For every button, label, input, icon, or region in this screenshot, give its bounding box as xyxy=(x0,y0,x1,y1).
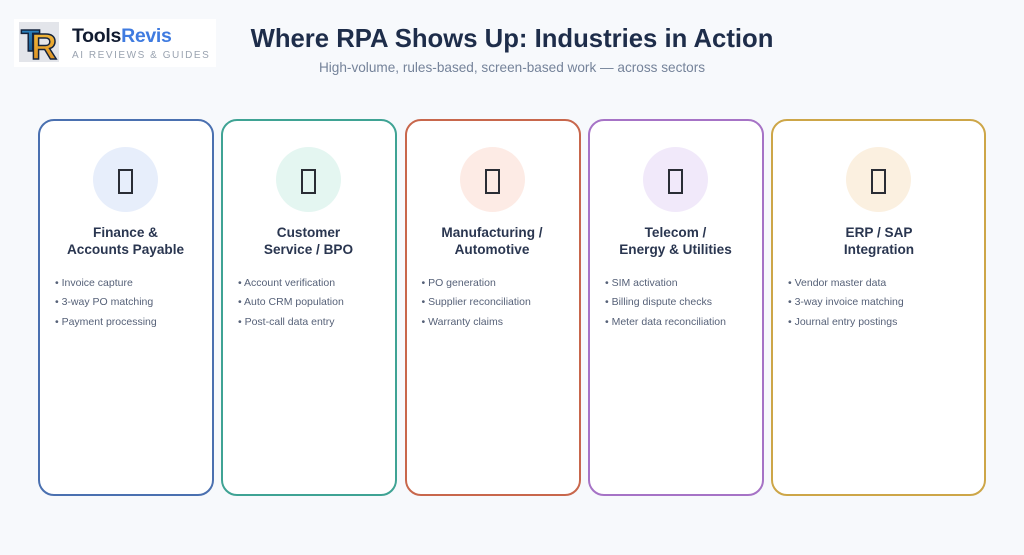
heading: customer service xyxy=(264,225,353,257)
list: erp: • Journal entry postings xyxy=(788,316,897,328)
icon: telecom xyxy=(643,147,708,212)
heading: manufacturing: Automotive xyxy=(455,242,529,257)
title: Where RPA Shows Up: Industries in Action xyxy=(251,24,773,52)
panel: telecom xyxy=(588,119,764,496)
list: erp: • 3-way invoice matching xyxy=(788,296,904,308)
heading: telecom: Telecom / xyxy=(645,225,706,240)
icon: finance xyxy=(93,147,158,212)
panel: erp xyxy=(771,119,986,496)
list: customer service: • Account verification xyxy=(238,276,335,288)
heading: erp: ERP / SAP xyxy=(846,225,912,240)
heading: finance: Accounts Payable xyxy=(67,242,184,257)
heading: customer service: Customer xyxy=(277,225,340,240)
icon: erp xyxy=(846,147,911,212)
heading: erp: Integration xyxy=(844,242,914,257)
heading: finance xyxy=(67,225,184,257)
list: finance: • 3-way PO matching xyxy=(55,296,153,308)
heading: manufacturing: Manufacturing / xyxy=(441,225,543,240)
list: telecom: • Meter data reconciliation xyxy=(605,316,726,328)
icon: customer service xyxy=(276,147,341,212)
subtitle: High-volume, rules-based, screen-based work — across sectors xyxy=(319,60,705,75)
list: telecom xyxy=(605,276,726,328)
list: finance: • Payment processing xyxy=(55,316,157,328)
list: manufacturing: • PO generation xyxy=(422,276,496,288)
icon: TR monogram: T xyxy=(21,23,40,58)
list: telecom: • SIM activation xyxy=(605,276,678,288)
list: telecom: • Billing dispute checks xyxy=(605,296,712,308)
heading: erp xyxy=(844,225,914,257)
list: customer service xyxy=(238,276,344,328)
list: manufacturing: • Warranty claims xyxy=(422,316,503,328)
panel: manufacturing xyxy=(404,119,580,496)
logo wordmark: ToolsRevis xyxy=(72,25,172,47)
heading: customer service: Service / BPO xyxy=(264,242,353,257)
icon: manufacturing xyxy=(460,147,524,212)
list: erp xyxy=(788,276,904,328)
list: erp: • Vendor master data xyxy=(788,276,886,288)
icon: TR monogram xyxy=(19,22,59,64)
list: customer service: • Auto CRM population xyxy=(238,296,344,308)
list: finance xyxy=(55,276,157,328)
list: manufacturing: • Supplier reconciliation xyxy=(422,296,531,308)
list: customer service: • Post-call data entry xyxy=(238,316,334,328)
heading: manufacturing xyxy=(441,225,543,257)
list: manufacturing xyxy=(422,276,531,328)
heading: telecom: Energy & Utilities xyxy=(619,242,732,257)
panel: finance xyxy=(38,119,214,496)
heading: telecom xyxy=(619,225,732,257)
panel: customer service xyxy=(221,119,397,496)
logo xyxy=(14,19,216,67)
heading: finance: Finance & xyxy=(93,225,158,240)
logo tagline: AI REVIEWS & GUIDES xyxy=(72,50,210,61)
list: finance: • Invoice capture xyxy=(55,276,133,288)
